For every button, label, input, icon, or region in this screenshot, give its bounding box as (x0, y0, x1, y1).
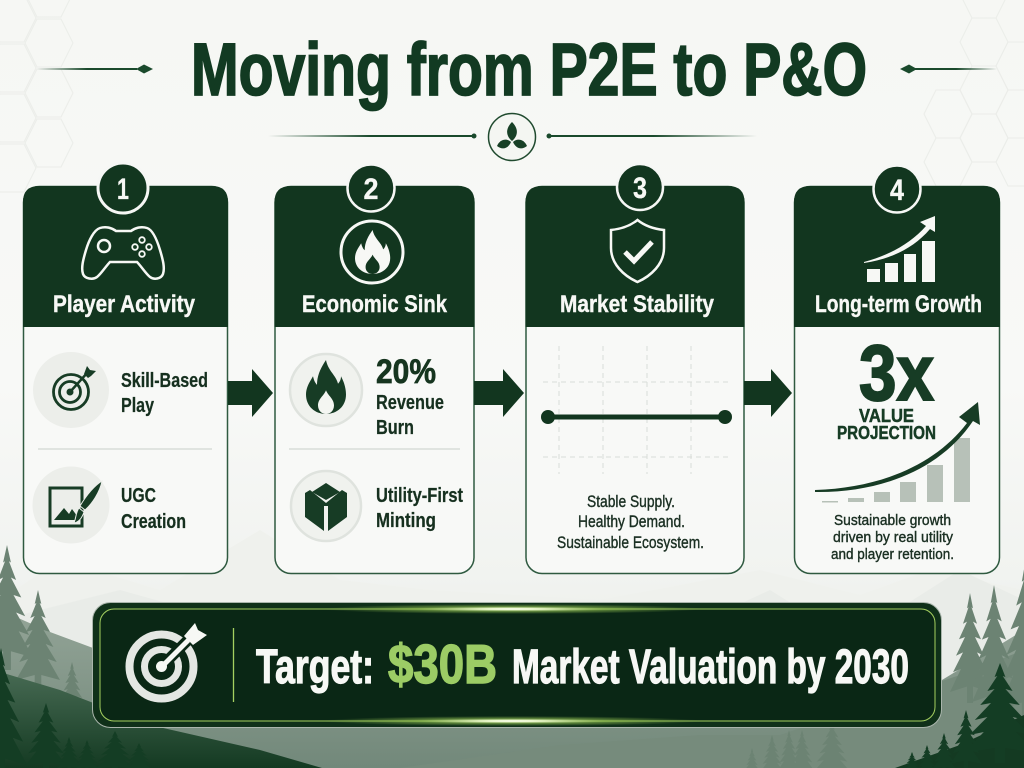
text: growth summary: Sustainable growth (834, 512, 951, 529)
dark ridges (0, 672, 322, 768)
text: target: Target: (256, 641, 374, 694)
icon: banner target (130, 623, 207, 698)
label: utility-first minting: Utility-First (376, 485, 463, 507)
label: utility-first minting: Minting (376, 510, 436, 532)
dark trees (0, 648, 1024, 768)
icon: leaf medallion (488, 114, 536, 160)
icon: revenue burn flame (290, 354, 362, 426)
subtitle divider left (268, 134, 476, 138)
icon: shield check (611, 220, 664, 282)
subtitle divider right (546, 134, 757, 138)
icon: mint cube (291, 471, 361, 541)
label: utility-first minting (376, 485, 463, 532)
label: skill-based play (121, 370, 208, 417)
text: stability summary: Sustainable Ecosystem. (557, 533, 704, 552)
chart: flat stability line (541, 346, 732, 474)
text: stability summary: Healthy Demand. (578, 512, 685, 531)
panel: long-term growth (794, 166, 1000, 574)
heading: market stability: Market Stability (560, 291, 715, 318)
label: ugc creation: UGC (121, 485, 156, 507)
heading: economic sink: Economic Sink (302, 291, 448, 318)
stat: 3x value projection: 3x (859, 328, 934, 417)
banner glow (322, 604, 702, 726)
arrow: step 2 to 3 (474, 369, 524, 417)
gray trees (0, 545, 1024, 768)
badge: 2: 2 (364, 173, 378, 206)
label: 20% revenue burn: 20% (376, 353, 436, 391)
chart: value growth (815, 402, 980, 502)
heading: player activity: Player Activity (53, 291, 196, 318)
stat: 3x value projection: PROJECTION (837, 423, 936, 443)
stat: 3x value projection: VALUE (859, 406, 914, 426)
panel: economic sink (274, 164, 474, 574)
badge: 1 (98, 163, 148, 213)
badge: 3 (617, 164, 663, 210)
title ornament right (900, 64, 997, 74)
badge: 4: 4 (890, 174, 904, 207)
icon: flame in circle (341, 221, 403, 283)
hexagon pattern right (924, 0, 1024, 186)
text: stability summary: Stable Supply. (587, 492, 675, 511)
text: growth summary: driven by real utility (833, 529, 953, 546)
text: growth summary (831, 512, 954, 563)
hexagon pattern left (0, 0, 73, 192)
mid hills (0, 610, 1024, 768)
label: 20% revenue burn (376, 353, 444, 439)
banner: target valuation (92, 602, 942, 728)
heading: long-term growth: Long-term Growth (815, 291, 982, 318)
badge: 1: 1 (117, 173, 129, 206)
distant mountains (0, 530, 1024, 768)
text: stability summary (557, 492, 704, 552)
panel: market stability (526, 164, 744, 574)
label: ugc creation (121, 485, 186, 533)
label: 20% revenue burn: Burn (376, 417, 414, 439)
arrow: step 1 to 2 (228, 369, 273, 417)
badge: 3: 3 (633, 172, 647, 205)
label: 20% revenue burn: Revenue (376, 392, 444, 414)
icon: growth bars with arrow (864, 216, 935, 282)
stat: 3x value projection (837, 328, 936, 443)
icon: game controller (82, 227, 164, 279)
badge: 2 (348, 164, 394, 212)
title ornament left (37, 64, 153, 74)
badge: 4 (874, 166, 920, 212)
arrow: step 3 to 4 (744, 369, 792, 417)
label: skill-based play: Skill-Based (121, 370, 208, 392)
icon: ugc creation (32, 466, 110, 544)
text: growth summary: and player retention. (831, 546, 954, 563)
panel: player activity (23, 163, 228, 574)
label: skill-based play: Play (121, 395, 155, 417)
icon: skill target (33, 352, 109, 428)
text: $30B: $30B (388, 633, 497, 695)
label: ugc creation: Creation (121, 511, 186, 533)
